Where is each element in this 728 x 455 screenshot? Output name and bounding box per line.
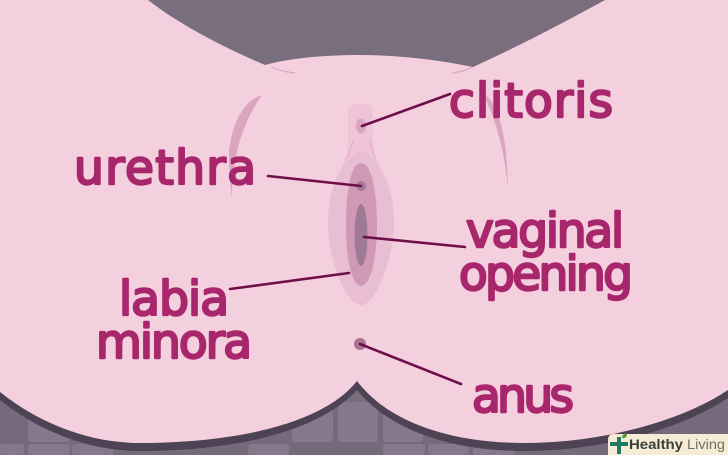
labia minora: [346, 163, 377, 286]
labia outer: [328, 150, 394, 305]
anus dot: [354, 338, 366, 350]
clitoris dot: [356, 118, 366, 134]
label: labia minora: labia: [119, 272, 229, 327]
urethra dot: [356, 181, 366, 191]
right fold: [483, 93, 508, 189]
anatomy: [328, 103, 394, 350]
label: clitoris: clitoris: [449, 74, 613, 129]
icon: cross: [610, 437, 628, 454]
label: labia minora: [96, 272, 252, 370]
label: urethra: urethra: [74, 141, 256, 196]
label: vaginal opening: [459, 204, 633, 302]
logo: Healthy Living: Healthy: [629, 436, 683, 452]
label: vaginal opening: opening: [459, 247, 633, 302]
vaginal opening: [354, 204, 368, 266]
icon: leaf: [622, 434, 627, 438]
hood side folds: [345, 141, 376, 160]
label: anus: anus: [472, 369, 574, 424]
label: vaginal opening: vaginal: [466, 204, 624, 259]
skin creases: [272, 67, 473, 73]
logo: Healthy Living: [608, 434, 728, 455]
body shadow: [0, 300, 728, 451]
left fold: [229, 95, 262, 198]
logo: Healthy Living: Living: [687, 436, 725, 452]
leader lines: [230, 94, 465, 384]
label: labia minora: minora: [96, 315, 252, 370]
clitoral hood: [342, 103, 380, 166]
